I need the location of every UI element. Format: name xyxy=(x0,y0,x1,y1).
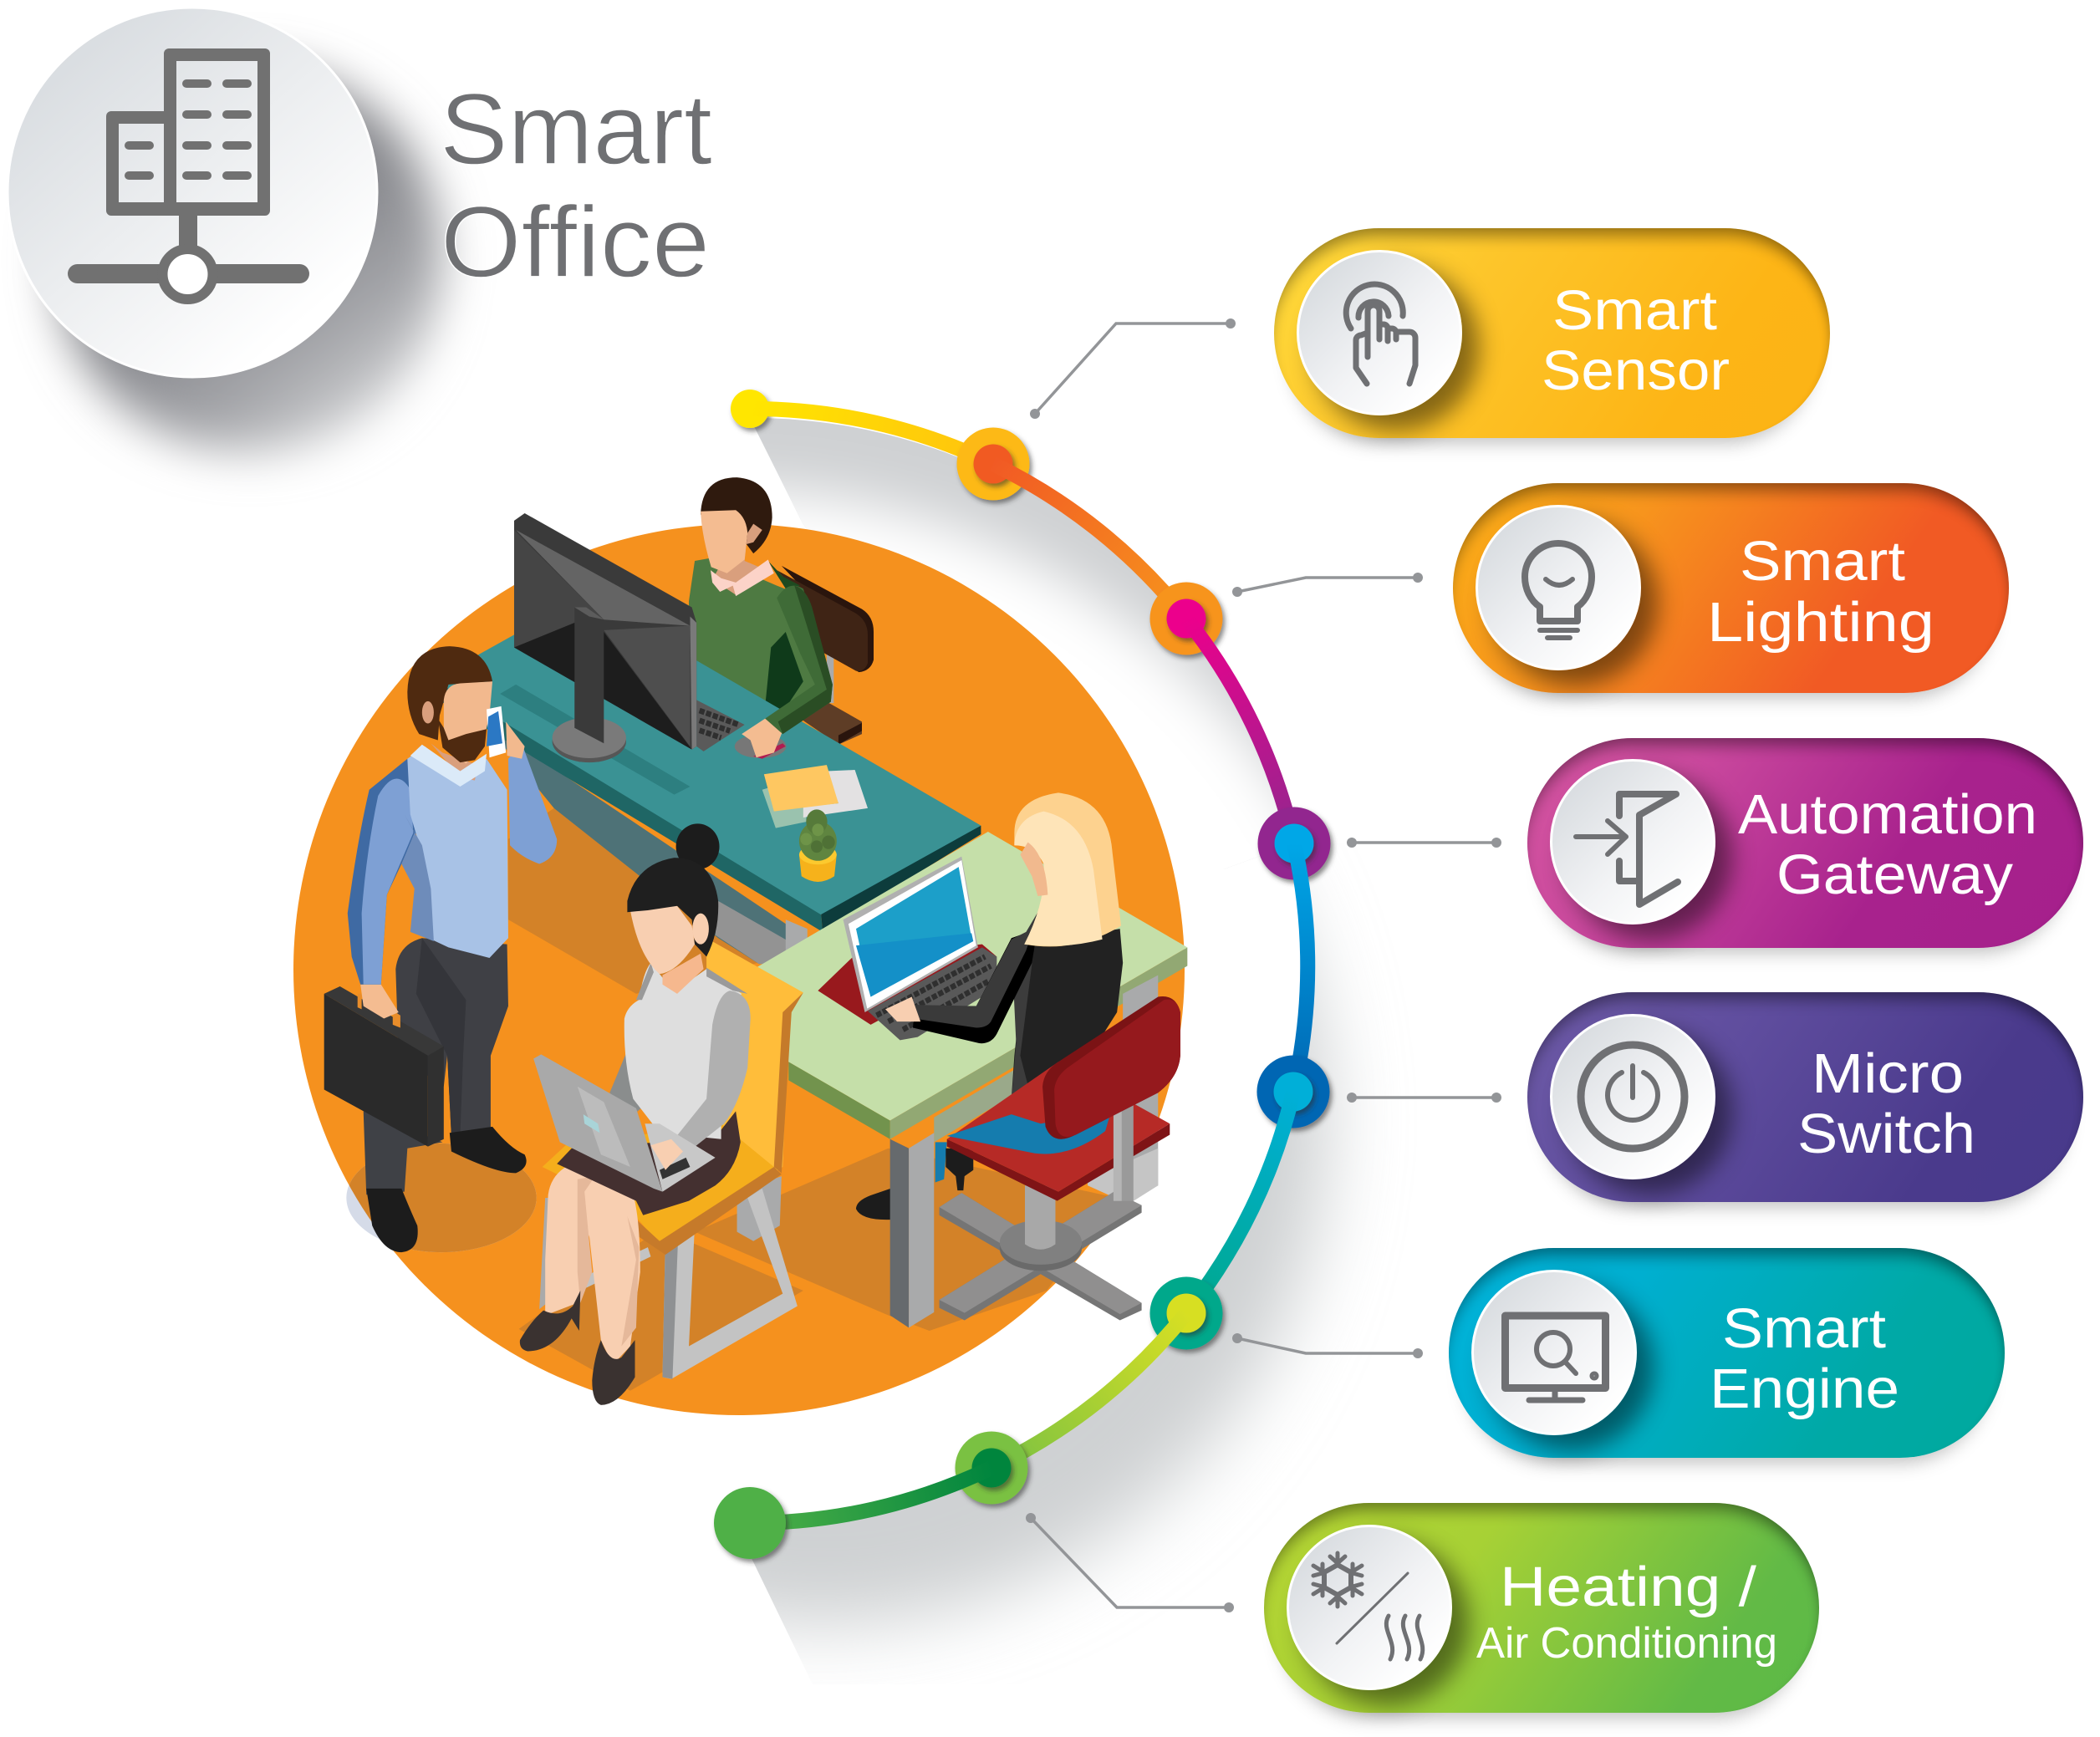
label: Automation Gateway xyxy=(1738,783,2037,906)
monitor xyxy=(514,513,696,750)
seated woman: torso xyxy=(609,963,751,1152)
pill: Smart Sensor xyxy=(1274,228,1830,438)
documents on desk xyxy=(762,765,868,828)
mouse and hand xyxy=(735,719,786,759)
label: Smart Engine: Engine xyxy=(1710,1358,1899,1420)
label: Smart Lighting: Smart xyxy=(1740,530,1905,593)
seated woman: shoes xyxy=(520,1291,635,1405)
infographic canvas xyxy=(8,8,1501,1659)
floor shadows xyxy=(508,808,1117,1391)
back chair xyxy=(777,566,874,745)
seated woman: skirt xyxy=(557,1111,741,1215)
icon: snowflake and heat waves xyxy=(1287,1525,1452,1690)
label: Automation Gateway: Automation xyxy=(1738,783,2037,846)
seated woman: legs xyxy=(545,1164,640,1365)
blonde woman foot xyxy=(935,1142,973,1190)
arc shadow: lower outer xyxy=(752,891,1361,1659)
label: Micro Switch: Switch xyxy=(1797,1103,1975,1165)
monitor keyboard xyxy=(696,700,745,751)
man at monitor: torso xyxy=(689,558,827,728)
briefcase xyxy=(324,985,444,1147)
man at monitor: arm xyxy=(765,586,833,734)
timeline arc with nodes xyxy=(714,390,1331,1559)
standing man: legs xyxy=(364,938,508,1195)
header icon: office buildings on network xyxy=(8,8,377,377)
silver laptop xyxy=(533,1054,716,1192)
label: Smart Sensor: Sensor xyxy=(1542,339,1730,402)
red chair xyxy=(947,996,1180,1201)
arc shadow: upper inner xyxy=(755,418,1277,869)
icon: gateway door xyxy=(1550,759,1715,925)
title: Office xyxy=(441,185,710,298)
black shoe under green desk xyxy=(856,1187,895,1220)
label: Smart Sensor xyxy=(1542,279,1730,402)
label: Smart Lighting: Lighting xyxy=(1707,591,1934,654)
pill: Smart Lighting xyxy=(1453,483,2009,693)
connector lines xyxy=(1026,318,1501,1612)
monitor stand base xyxy=(553,717,626,762)
orange background circle xyxy=(293,524,1185,1415)
title xyxy=(440,72,712,298)
icon: power button xyxy=(1550,1014,1715,1179)
potted plant xyxy=(799,809,837,882)
title: Smart xyxy=(440,72,712,186)
teal desk xyxy=(434,595,981,964)
red mat and laptop keyboard xyxy=(818,945,996,1040)
standing man: head xyxy=(407,646,525,787)
pill: Heating / Air Conditioning xyxy=(1264,1503,1819,1713)
icon: monitor with magnifier xyxy=(1471,1270,1637,1435)
label: Micro Switch: Micro xyxy=(1812,1042,1964,1105)
label: Smart Engine: Smart xyxy=(1722,1297,1886,1360)
pill: Smart Engine xyxy=(1449,1248,2005,1458)
red chair base xyxy=(940,1149,1158,1320)
label: Heating / Air Conditioning xyxy=(1476,1556,1777,1668)
label: Smart Lighting xyxy=(1707,530,1934,654)
illustration: isometric office scene xyxy=(324,477,1187,1405)
man shadow xyxy=(346,1144,537,1252)
standing man: shoes xyxy=(366,1127,527,1252)
label: Heating / Air Conditioning: Heating / xyxy=(1500,1556,1756,1618)
pill: Micro Switch xyxy=(1527,992,2083,1202)
pill: Automation Gateway xyxy=(1527,738,2083,948)
label: Heating / Air Conditioning: Air Conditioning xyxy=(1476,1619,1777,1668)
man at monitor: head xyxy=(701,477,774,596)
label: Smart Sensor: Smart xyxy=(1552,279,1717,342)
label: Smart Engine xyxy=(1710,1297,1899,1420)
standing man: sweater xyxy=(348,743,557,985)
laptop screen xyxy=(844,857,978,1012)
yellow chair legs xyxy=(539,1176,798,1379)
label: Automation Gateway: Gateway xyxy=(1776,843,2014,906)
label: Micro Switch xyxy=(1797,1042,1975,1165)
seated woman: head xyxy=(627,823,720,994)
green desk xyxy=(691,832,1187,1327)
yellow chair xyxy=(543,938,803,1255)
icon: touch sensor xyxy=(1297,250,1462,415)
icon: light bulb xyxy=(1476,505,1641,670)
header icon shadow xyxy=(55,65,443,453)
blonde woman xyxy=(885,792,1123,1123)
